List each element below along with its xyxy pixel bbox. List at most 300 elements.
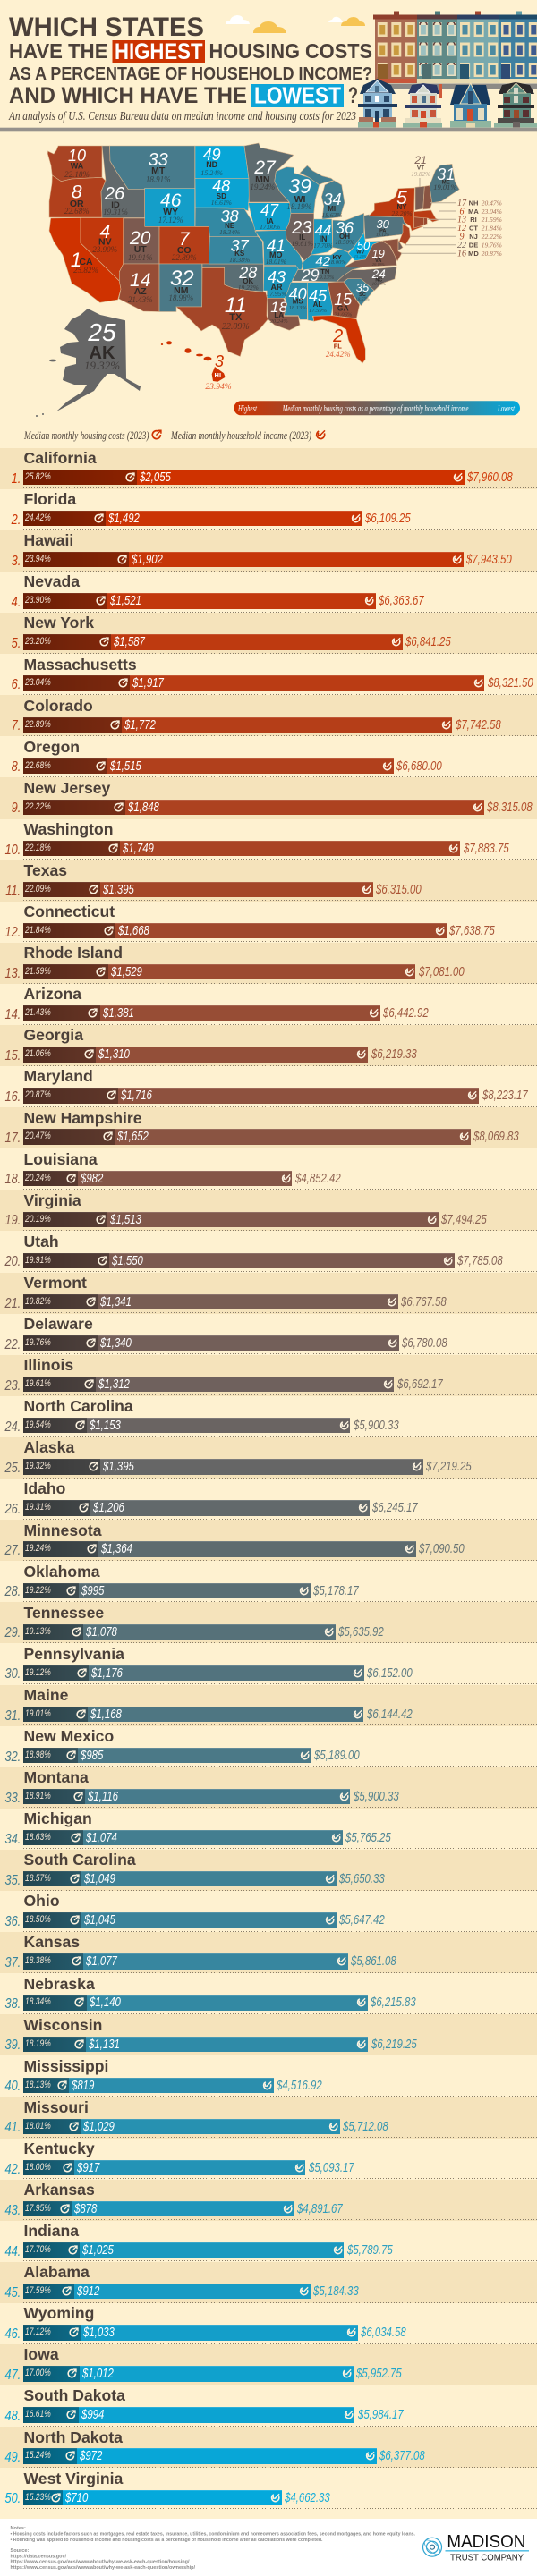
row 27 Minnesota: 27. [4,1543,21,1558]
row 14 Arizona [0,984,537,1025]
northeast state list: 16 [457,250,466,259]
state: SD: SD [217,192,226,200]
state: AK: 19.32% [84,359,120,372]
state: MO: MO [269,250,283,259]
row 28 Oklahoma: 28. [4,1584,21,1599]
row 37 Kansas: $5,861.08 [351,1953,396,1969]
row 6 Massachusetts: $1,917 [132,675,164,691]
state: KS: 18.38% [229,256,250,264]
title [9,13,372,109]
row 47 Iowa: 17.00% [25,2368,51,2378]
state: MN: 19.24% [250,182,275,191]
row 1 California [0,448,537,489]
state: AR: 43 [268,268,286,286]
row 28 Oklahoma [0,1561,537,1602]
row 36 Ohio: 36. [4,1914,21,1929]
row 3 Hawaii: $1,902 [132,552,163,567]
row 30 Pennsylvania: 19.12% [25,1667,51,1678]
state: SC: 18.57% [355,298,370,302]
state: NC: 24 [371,267,386,281]
row 48 South Dakota: $5,984.17 [358,2407,404,2422]
state: NM: 18.98% [168,293,193,302]
row 17 New Hampshire [0,1107,537,1148]
state: TX: TX [229,312,243,323]
house 4 [494,82,537,127]
state: OH: 18.50% [335,239,354,246]
row 15 Georgia: 15. [4,1048,21,1063]
row 12 Connecticut: $7,638.75 [449,923,495,938]
state: WY: WY [163,207,178,217]
state: SD: 48 [212,177,230,195]
row 48 South Dakota: South Dakota [23,2386,125,2404]
row 46 Wyoming: 17.12% [25,2326,51,2337]
state: FL [313,316,365,363]
row 8 Oregon: $6,680.00 [396,758,442,774]
row 7 Colorado: Colorado [23,697,93,715]
row 13 Rhode Island: Rhode Island [23,944,123,962]
row 13 Rhode Island: 13. [4,966,21,981]
row 32 New Mexico: 32. [4,1750,21,1765]
row 27 Minnesota [0,1520,537,1561]
row 19 Virginia [0,1190,537,1231]
state: WI: 39 [288,174,311,198]
row 28 Oklahoma: $5,178.17 [313,1583,359,1598]
state: NY: NY [396,203,407,211]
row 40 Mississippi: $819 [72,2078,94,2093]
row 30 Pennsylvania: $1,176 [91,1665,123,1681]
state: AZ: 14 [130,270,150,291]
row 24 North Carolina: $5,900.33 [354,1418,398,1433]
row 25 Alaska: Alaska [23,1438,74,1456]
clouds [226,15,365,33]
state: OH [333,213,364,252]
row 18 Louisiana: 20.24% [25,1173,51,1183]
row 12 Connecticut: 12. [4,925,21,940]
row 38 Nebraska: 38. [4,1996,21,2012]
state: SC: 35 [356,281,370,294]
state: AZ: AZ [134,286,147,297]
state: IN: IN [319,234,328,243]
state: KS: 37 [231,237,250,255]
state: OH: 36 [336,219,354,237]
row 26 Idaho: $6,245.17 [372,1500,418,1515]
logo: Madison Trust Company: MADISON [447,2531,525,2552]
state: AZ [119,264,159,311]
state: TX [176,267,268,356]
row 22 Delaware: Delaware [23,1315,93,1333]
row 18 Louisiana: Louisiana [23,1150,98,1168]
state: AR: 17.95% [266,290,287,298]
row 48 South Dakota: 16.61% [25,2409,51,2419]
state: MN: MN [255,174,269,185]
state: DE [398,240,403,250]
row 19 Virginia: Virginia [23,1191,81,1209]
row 2 Florida: 24.42% [25,513,51,523]
state: ID: 19.31% [103,208,128,216]
row 7 Colorado [0,695,537,736]
row 13 Rhode Island: 21.59% [25,966,51,977]
row 42 Kentucky: 18.00% [25,2162,51,2173]
state: OR [49,175,106,217]
state: NV: 4 [99,222,110,242]
row 43 Arkansas [0,2180,537,2221]
row 22 Delaware: $6,780.08 [402,1335,448,1351]
row 32 New Mexico: New Mexico [23,1727,114,1745]
row 39 Wisconsin: 39. [4,2038,21,2053]
state: NY: 23.20% [391,209,413,217]
state: IN [311,219,333,255]
state: AL [307,283,333,321]
row 7 Colorado: $1,772 [124,717,156,733]
row 27 Minnesota: 19.24% [25,1543,51,1554]
state: WI: 18.19% [286,202,311,211]
row 11 Texas: Texas [23,861,67,879]
row 41 Missouri: Missouri [23,2098,89,2116]
row 35 South Carolina: South Carolina [23,1851,136,1868]
state: MI: MI [328,205,336,213]
state: MA [414,210,439,222]
house 2 [403,83,442,127]
northeast state list: 22.22% [482,233,502,241]
row 10 Washington [0,819,537,860]
state: KY [302,249,354,270]
state: KY: KY [332,253,342,261]
row 49 North Dakota: 49. [4,2450,21,2465]
state: ME: ME [442,181,450,186]
row 35 South Carolina: $5,650.33 [339,1871,385,1886]
state: KY: 18.00% [328,259,346,266]
state: ME: 19.01% [433,182,456,191]
row 29 Tennessee: 19.13% [25,1626,51,1637]
row 34 Michigan: Michigan [23,1809,92,1827]
row 43 Arkansas: $878 [74,2201,98,2216]
row 3 Hawaii [0,530,537,572]
row 48 South Dakota [0,2385,537,2427]
state: MI: 34 [324,191,342,208]
row 25 Alaska: $7,219.25 [426,1459,472,1474]
row 16 Maryland: 20.87% [25,1089,51,1100]
row 30 Pennsylvania: $6,152.00 [367,1665,413,1681]
row 18 Louisiana: $4,852.42 [295,1171,341,1186]
row 36 Ohio: $5,647.42 [339,1912,385,1928]
row 14 Arizona: 14. [4,1007,21,1022]
notes and sources: https://data.census.gov/ [11,2554,66,2559]
state: ME: 31 [437,165,455,183]
row 50 West Virginia: $4,662.33 [285,2490,330,2505]
row 38 Nebraska: $1,140 [90,1995,120,2010]
bar key: household income: Median monthly household income (2023) [170,428,311,442]
row 14 Arizona: $6,442.92 [383,1005,429,1021]
state: OK: OK [243,277,254,285]
row 37 Kansas [0,1932,537,1973]
row 32 New Mexico: 18.98% [25,1750,51,1760]
footer [0,2519,537,2576]
row 49 North Dakota: 15.24% [25,2450,51,2461]
state: TX: 11 [225,293,247,318]
row 39 Wisconsin: $6,219.25 [371,2037,416,2052]
row 11 Texas: 11. [5,884,21,899]
row 40 Mississippi: Mississippi [23,2057,108,2075]
state: NE [195,208,258,237]
state: AK [36,309,141,417]
row 15 Georgia: 21.06% [25,1048,51,1059]
row 50 West Virginia: 50. [4,2491,21,2506]
row 33 Montana: 33. [4,1791,21,1806]
state: CT [414,217,423,228]
row 35 South Carolina: 18.57% [25,1873,51,1884]
row 17 New Hampshire: 20.47% [25,1131,51,1141]
state: IA: 47 [260,201,279,219]
row 35 South Carolina: 35. [4,1873,21,1888]
state: LA: 18 [270,299,288,316]
row 31 Maine: $1,168 [90,1707,122,1722]
row 20 Utah: Utah [23,1233,59,1250]
row 9 New Jersey: 22.22% [25,801,51,812]
row 39 Wisconsin: 18.19% [25,2038,51,2049]
row 6 Massachusetts [0,654,537,695]
state: CO: 7 [179,229,191,250]
row 5 New York [0,613,537,654]
state: WI [275,167,320,213]
title: HIGHEST [115,39,202,64]
state: NC [337,267,396,291]
row 12 Connecticut [0,902,537,943]
row 5 New York: $6,841.25 [405,634,451,649]
state: GA: 21.06% [334,311,353,318]
row 1 California: $7,960.08 [467,470,513,485]
row 9 New Jersey [0,777,537,819]
state: MT [109,146,195,190]
row 6 Massachusetts: $8,321.50 [488,675,533,691]
row 8 Oregon [0,736,537,777]
state: CO [159,226,209,264]
state: WI: WI [294,194,305,205]
row 2 Florida [0,489,537,530]
row 36 Ohio: Ohio [23,1892,60,1910]
state: VA: 20.19% [372,262,385,267]
state: ID: 26 [104,184,125,204]
state: OR: OR [70,199,84,209]
row 48 South Dakota: $994 [81,2407,104,2422]
state: ND: 15.24% [200,169,223,177]
row 6 Massachusetts: 6. [11,677,21,692]
row 42 Kentucky [0,2139,537,2180]
row 29 Tennessee: Tennessee [23,1604,104,1622]
row 28 Oklahoma: 19.22% [25,1585,51,1596]
state: MN [244,143,294,202]
state: OR: 22.68% [64,207,90,216]
state: ID [101,146,145,218]
state: VA: VA [375,258,381,264]
row 42 Kentucky: $917 [77,2160,99,2175]
row 21 Vermont: Vermont [23,1274,87,1292]
row 24 North Carolina: $1,153 [90,1418,121,1433]
row 50 West Virginia [0,2468,537,2509]
state: NM: 32 [170,267,194,291]
row 3 Hawaii: $7,943.50 [466,552,512,567]
row 24 North Carolina: 19.54% [25,1419,51,1430]
VT callout: 19.82% [411,171,430,178]
row 38 Nebraska: $6,215.83 [371,1995,416,2010]
state: NE: NE [225,222,235,230]
row 2 Florida: Florida [23,490,76,508]
northeast state list: 20.47% [482,199,502,208]
row 16 Maryland: 16. [4,1089,21,1105]
row 14 Arizona: Arizona [23,985,81,1003]
row 33 Montana: $5,900.33 [354,1789,398,1804]
state: WV: 15.23% [354,254,367,258]
row 22 Delaware: $1,340 [100,1335,132,1351]
row 43 Arkansas: 17.95% [25,2203,51,2214]
row 44 Indiana: Indiana [23,2222,79,2240]
state: IA: IA [267,217,274,225]
row 10 Washington: $1,749 [123,841,154,856]
notes and sources: Notes: [11,2526,26,2531]
state: MS: 18.13% [289,305,307,311]
state: WV [348,233,382,261]
row 33 Montana: Montana [23,1768,89,1786]
row 3 Hawaii: Hawaii [23,531,73,549]
row 37 Kansas: $1,077 [86,1953,117,1969]
row 17 New Hampshire: New Hampshire [23,1109,141,1127]
northeast state list: RI [470,216,477,224]
state: AZ: 21.43% [128,295,153,304]
state: IA: 17.00% [260,223,280,231]
row 23 Illinois: $6,692.17 [397,1377,443,1392]
row 23 Illinois: 19.61% [25,1378,51,1389]
row 19 Virginia: $1,513 [110,1212,141,1227]
row 40 Mississippi [0,2055,537,2097]
northeast state list: 22 [457,241,466,250]
row 26 Idaho: $1,206 [93,1500,124,1515]
row 10 Washington: Washington [23,820,114,838]
row 13 Rhode Island: $1,529 [111,964,141,979]
state: HI: 3 [215,352,224,370]
subtitle: An analysis of U.S. Census Bureau data on median income and housing costs for 2023 [8,109,356,123]
row 2 Florida: $1,492 [108,511,140,526]
state: HI: 23.94% [205,383,232,392]
state: SC [344,279,374,306]
northeast state list [401,199,502,259]
row 11 Texas [0,860,537,902]
row 11 Texas: $1,395 [103,882,134,897]
row 27 Minnesota: $7,090.50 [419,1541,465,1556]
state: WA [47,146,102,182]
row 15 Georgia: $1,310 [98,1046,130,1062]
state: KS [209,236,263,264]
northeast state list: 20.87% [482,250,502,258]
logo: Madison Trust Company [422,2531,529,2563]
colour scale legend: Lowest [497,404,515,414]
row 8 Oregon: 8. [11,759,21,775]
row 10 Washington: $7,883.75 [464,841,508,856]
row 49 North Dakota [0,2427,537,2468]
state: OK: 28 [238,264,257,282]
notes and sources: • Rounding was applied to household income and housing costs as a percentage of household income after all calculations were completed. [11,2538,323,2543]
row 43 Arkansas: 43. [4,2203,21,2218]
state: HI: HI [215,371,221,379]
row 36 Ohio [0,1891,537,1932]
northeast state list: 12 [457,224,466,233]
row 4 Nevada: $1,521 [110,593,141,608]
row 13 Rhode Island: $7,081.00 [419,964,465,979]
house 1 [358,79,397,127]
row 35 South Carolina: $1,049 [84,1871,115,1886]
row 37 Kansas: 18.38% [25,1955,51,1966]
row 28 Oklahoma: $995 [81,1583,104,1598]
row 9 New Jersey: New Jersey [23,779,110,797]
state: UT: 20 [129,228,151,249]
northeast state list: 9 [460,233,464,242]
row 14 Arizona: $1,381 [102,1005,133,1021]
row 41 Missouri: $1,029 [83,2119,115,2134]
state: IA [248,201,294,231]
row 40 Mississippi: 18.13% [25,2080,51,2090]
state: AR [263,266,298,298]
row 12 Connecticut: $1,668 [118,923,149,938]
northeast state list: DE [469,242,478,249]
northeast state list: MA [468,208,479,216]
state: AK: 25 [87,318,116,346]
house 3 [450,83,491,127]
row 26 Idaho: 26. [4,1502,21,1517]
state: CO: 22.89% [172,253,197,262]
row 44 Indiana: 17.70% [25,2244,51,2255]
state: NM [159,264,202,311]
row 5 New York: 5. [11,636,21,651]
row 23 Illinois: Illinois [23,1356,73,1374]
state: FL: 24.42% [326,350,351,359]
row 15 Georgia: Georgia [23,1026,83,1044]
row 25 Alaska [0,1437,537,1479]
row 45 Alabama: Alabama [23,2263,90,2281]
state: MO [255,230,303,270]
row 8 Oregon: 22.68% [25,760,51,771]
row 30 Pennsylvania: Pennsylvania [23,1645,124,1663]
row 26 Idaho: 19.31% [25,1502,51,1513]
northeast state list: 21.84% [482,224,502,233]
state: WA: 22.18% [64,170,90,179]
row 33 Montana: 18.91% [25,1791,51,1801]
state: NC: NC [375,277,382,283]
row 7 Colorado: $7,742.58 [456,717,501,733]
row 31 Maine [0,1685,537,1726]
row 47 Iowa: 47. [4,2368,21,2383]
title: AS A PERCENTAGE OF HOUSEHOLD INCOME? [9,64,372,84]
row 41 Missouri [0,2097,537,2139]
row 37 Kansas: 37. [4,1955,21,1970]
row 46 Wyoming: Wyoming [23,2304,94,2322]
row 42 Kentucky: 42. [4,2162,21,2177]
row 20 Utah: 20. [4,1254,21,1269]
row 17 New Hampshire: $8,069.83 [473,1129,519,1144]
row 38 Nebraska: Nebraska [23,1975,95,1993]
row 16 Maryland [0,1066,537,1107]
state: WY: 17.12% [158,216,183,225]
state: KY: 42 [315,254,331,269]
title: AND WHICH HAVE THE [9,83,247,108]
state: RI [423,217,427,225]
row 43 Arkansas: $4,891.67 [297,2201,343,2216]
row 1 California: California [23,449,97,467]
state: WV: WV [356,250,364,256]
state: HI [161,341,232,392]
state: ND: 49 [203,146,221,164]
row 9 New Jersey: $1,848 [128,800,159,815]
row 13 Rhode Island [0,943,537,984]
state: MT: MT [151,165,166,176]
row 50 West Virginia: 15.23% [25,2492,51,2503]
